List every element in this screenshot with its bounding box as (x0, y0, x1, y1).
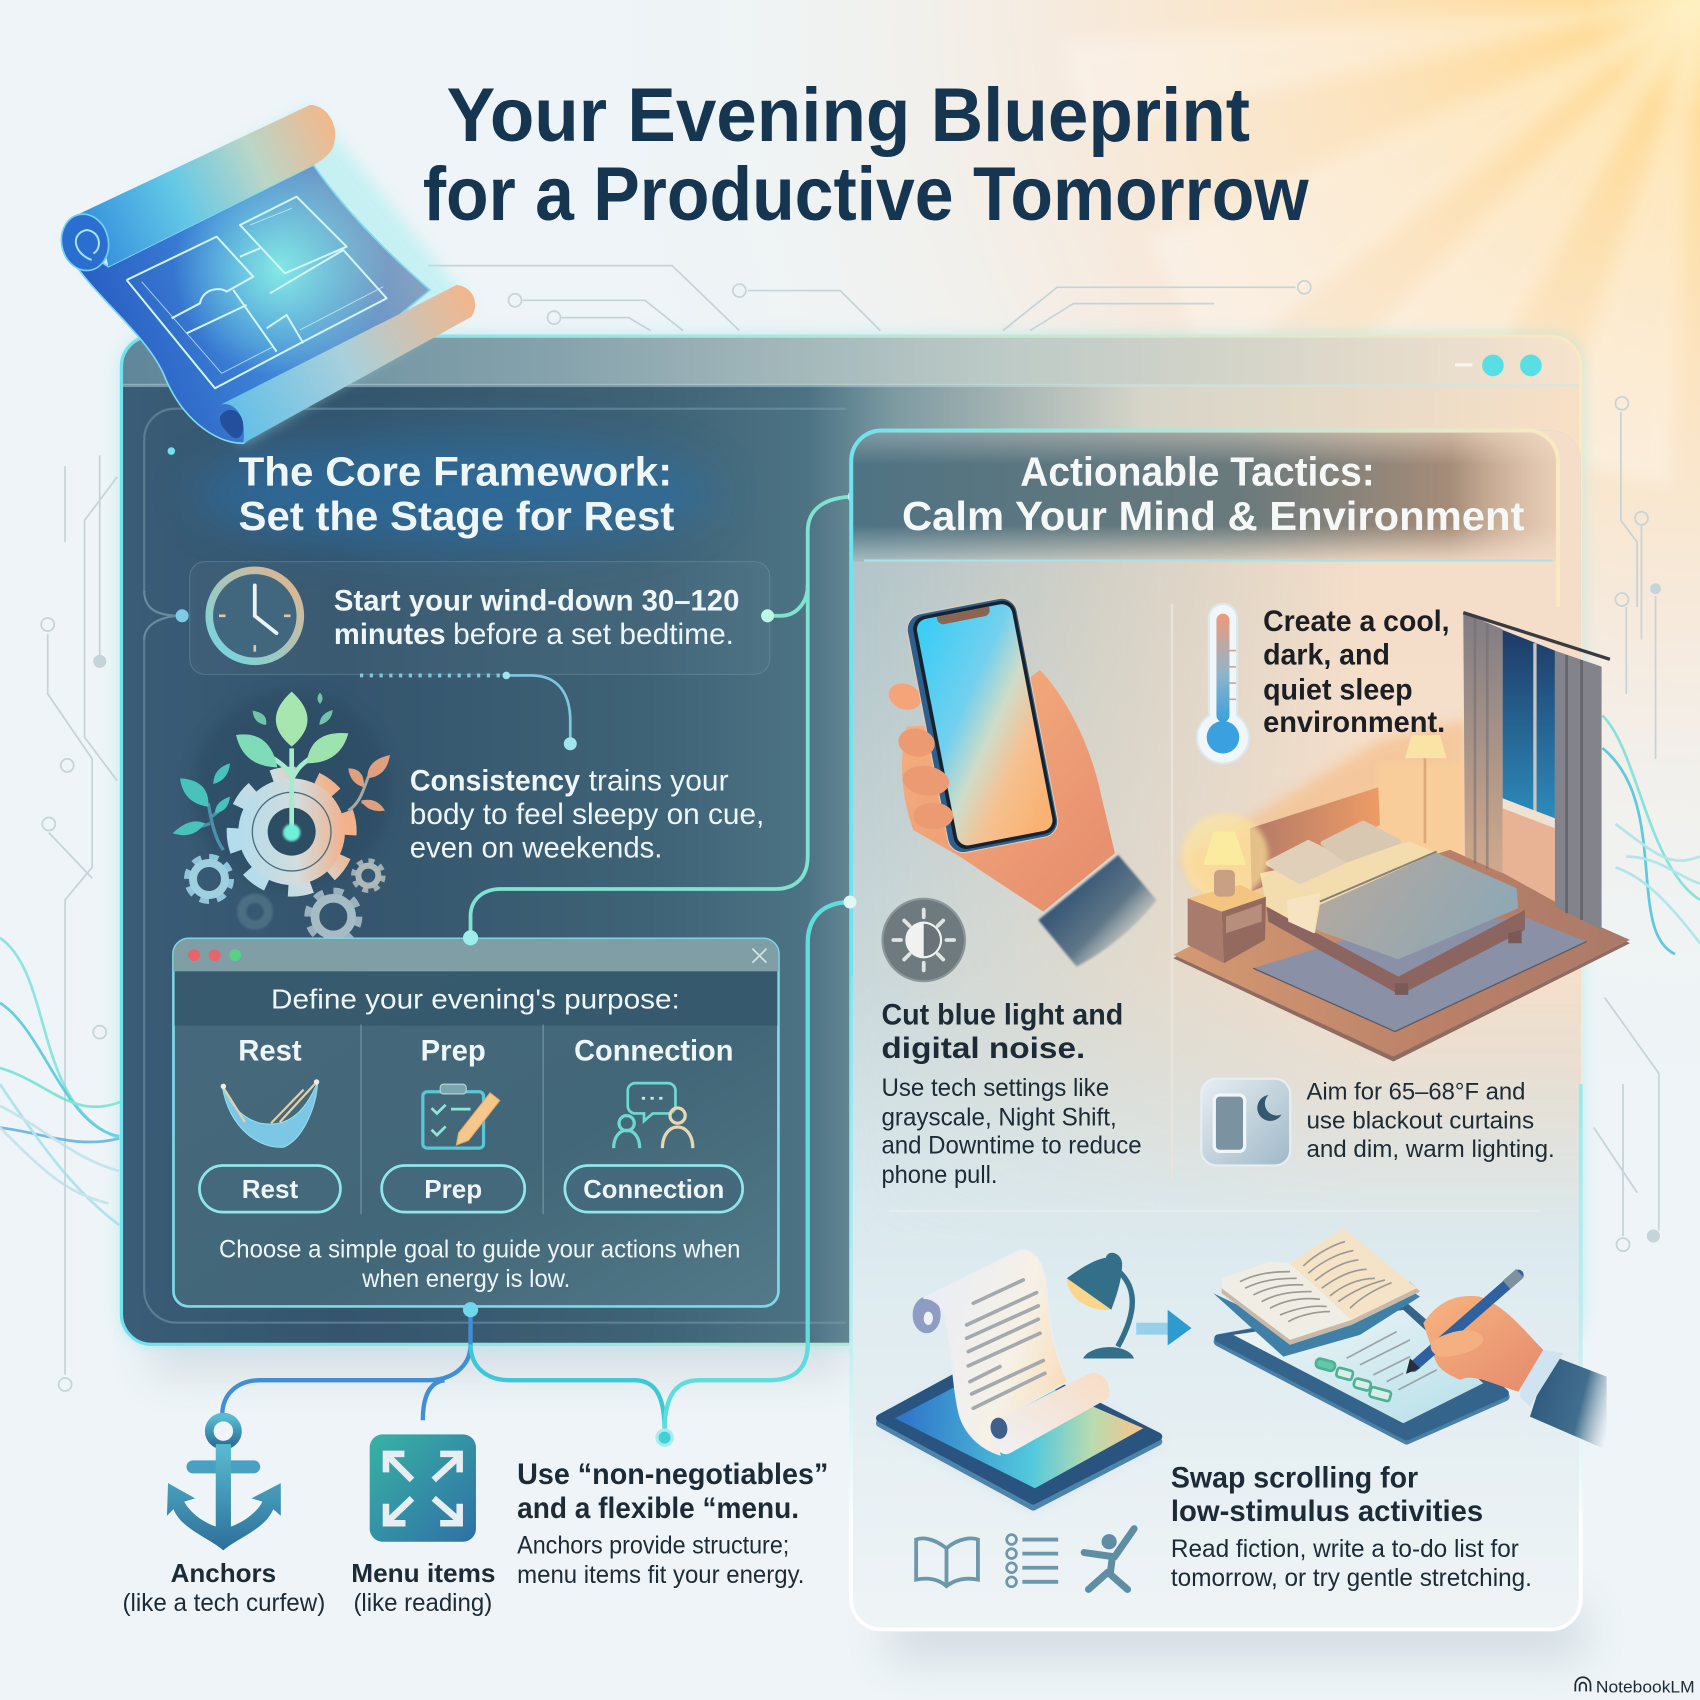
phone body (904, 596, 1060, 855)
rug (1253, 917, 1587, 1032)
main window frame (121, 336, 1581, 1344)
sheet (63, 165, 430, 443)
text: consistency: Consistency (410, 765, 581, 797)
wall under window (1503, 807, 1555, 913)
heading: core framework (239, 449, 675, 539)
text: swap scrolling (1171, 1462, 1532, 1592)
purpose note: when energy is low. (361, 1265, 570, 1293)
icon: plant and gears (173, 690, 392, 941)
pill: connection: Connection (583, 1174, 724, 1204)
text: wind-down (334, 585, 739, 651)
bed (1250, 787, 1525, 995)
labels: anchors and menu items: Anchors (171, 1558, 276, 1588)
text: non-negotiables: and a flexible “menu. (517, 1493, 799, 1525)
tablet (1218, 1305, 1505, 1440)
labels: anchors and menu items (123, 1558, 495, 1617)
text: non-negotiables: menu items fit your energy. (517, 1561, 804, 1589)
drop shadows under panels (152, 1328, 1583, 1659)
labels: anchors and menu items: (like reading) (353, 1589, 492, 1617)
sleeve (1038, 855, 1157, 967)
text: cut blue light: grayscale, Night Shift, (881, 1103, 1117, 1131)
top roll (77, 105, 335, 267)
blue glow behind heading (195, 439, 716, 548)
window: define your evening's purpose (173, 939, 778, 1306)
icon: brightness (883, 899, 965, 981)
text: temperature tip (1306, 1078, 1555, 1163)
text: cut blue light (881, 1000, 1142, 1189)
text: temperature tip: use blackout curtains (1306, 1108, 1534, 1135)
right sprig (348, 755, 390, 811)
hand (1423, 1296, 1543, 1392)
text: swap scrolling: Read fiction, write a to-do list for (1171, 1535, 1519, 1563)
text: non-negotiables (517, 1459, 828, 1589)
text: consistency: trains your (589, 765, 729, 797)
right curtain (1555, 651, 1602, 930)
text: cut blue light: Use tech settings like (881, 1074, 1109, 1102)
checklist on tablet (1315, 1332, 1437, 1402)
text: swap scrolling: tomorrow, or try gentle stretching. (1171, 1564, 1532, 1592)
left sprig (173, 763, 230, 850)
thumb (1431, 1330, 1483, 1357)
icon: night mode switch (1201, 1079, 1290, 1165)
paper scroll (913, 1250, 1110, 1455)
icon: anchor (167, 1417, 281, 1550)
text: consistency: even on weekends. (410, 833, 662, 865)
pill: rest (199, 1165, 340, 1212)
dotted connector (360, 672, 577, 750)
rear finger (885, 679, 925, 714)
small gears (188, 858, 382, 941)
text: temperature tip: and dim, warm lighting. (1306, 1136, 1555, 1163)
sleeve and cuff (1520, 1350, 1607, 1450)
pill: prep: Prep (424, 1174, 482, 1204)
text: temperature tip: Aim for 65–68°F and (1306, 1078, 1525, 1105)
text: cool dark quiet: environment. (1263, 707, 1445, 739)
wave lines right (1602, 716, 1700, 954)
right panel: actionable tactics (851, 430, 1581, 1630)
icon: thermometer (1197, 604, 1249, 763)
floor lamp (1405, 735, 1447, 843)
column: prep: Prep (421, 1035, 486, 1067)
text: wind-down: Start your wind-down 30–120 (334, 585, 739, 617)
nightstand with lamp (1182, 813, 1268, 963)
illustration: book, tablet and writing hand (1213, 1228, 1607, 1450)
purpose note: Choose a simple goal to guide your actions when (219, 1236, 740, 1264)
text: cool dark quiet: dark, and (1263, 640, 1390, 672)
pill: connection (565, 1165, 743, 1212)
front fingers (896, 726, 953, 829)
floor plan lines (127, 197, 387, 388)
text: cool dark quiet: Create a cool, (1263, 606, 1450, 638)
wave lines left (0, 938, 136, 1225)
wall glow (1180, 720, 1467, 967)
palm (902, 670, 1115, 912)
icon: desk lamp (1067, 1253, 1134, 1358)
text: wind-down: minutes (334, 619, 446, 651)
connector: bottom branches (222, 896, 857, 1445)
logo: NotebookLM: NotebookLM (1596, 1678, 1695, 1696)
text: consistency (410, 765, 764, 865)
purpose heading band: Define your evening's purpose: (271, 982, 680, 1014)
pill: rest: Rest (242, 1174, 298, 1204)
text: swap scrolling: low-stimulus activities (1171, 1496, 1483, 1528)
icon: stretching figure (1084, 1529, 1134, 1589)
text: non-negotiables: Use “non-negotiables” (517, 1459, 828, 1491)
illustration: scroll on tablet (880, 1250, 1162, 1510)
column: prep (421, 1035, 500, 1148)
pill: prep (382, 1165, 525, 1212)
icon: blueprint scroll (56, 105, 475, 443)
text: wind-down: before a set bedtime. (453, 619, 734, 651)
text: swap scrolling: Swap scrolling for (1171, 1462, 1418, 1494)
text: non-negotiables: Anchors provide structure; (517, 1532, 789, 1560)
window (1503, 630, 1555, 828)
pen (1406, 1273, 1520, 1374)
window title bar (173, 939, 778, 971)
heading: core framework: The Core Framework: (239, 449, 672, 495)
illustration: bedroom (1173, 613, 1630, 1062)
text: cut blue light: Cut blue light and (881, 1000, 1123, 1032)
column: rest (221, 1035, 319, 1147)
text: cool dark quiet (1263, 606, 1450, 739)
title (423, 73, 1310, 237)
heading: actionable tactics: Actionable Tactics: (1020, 449, 1375, 495)
tablet (880, 1355, 1158, 1507)
left curtain (1463, 613, 1503, 873)
background circuit lines (41, 266, 1661, 1391)
text: consistency: body to feel sleepy on cue, (410, 799, 764, 831)
icon: clock (209, 570, 300, 661)
heading: core framework: Set the Stage for Rest (239, 493, 675, 539)
text: cut blue light: and Downtime to reduce (881, 1132, 1142, 1160)
column: rest: Rest (238, 1035, 302, 1067)
icon: hand holding phone (885, 596, 1157, 967)
main gear (222, 762, 361, 901)
title: for a Productive Tomorrow (423, 152, 1310, 237)
lower roll (220, 285, 475, 443)
callout box: wind-down (190, 562, 770, 674)
icon: open book (916, 1538, 978, 1586)
column: connection (574, 1035, 733, 1148)
text: cut blue light: phone pull. (881, 1161, 997, 1189)
arrow (1136, 1310, 1192, 1345)
icon: checklist (1007, 1535, 1058, 1587)
text: cool dark quiet: quiet sleep (1263, 674, 1413, 706)
plant (236, 692, 348, 841)
floor (1173, 850, 1630, 1062)
labels: anchors and menu items: (like a tech curfew) (123, 1589, 325, 1617)
heading: actionable tactics: Calm Your Mind & Environment (902, 493, 1525, 539)
labels: anchors and menu items: Menu items (351, 1558, 495, 1588)
heading: actionable tactics (902, 449, 1525, 539)
icon: expand menu (370, 1434, 476, 1542)
purpose heading band (175, 971, 777, 1026)
purpose note (219, 1236, 740, 1293)
connector: framework to tactics (471, 489, 863, 938)
column: connection: Connection (574, 1035, 733, 1067)
open book (1213, 1228, 1420, 1357)
title: Your Evening Blueprint (447, 73, 1250, 158)
text: cut blue light: digital noise. (881, 1033, 1085, 1065)
